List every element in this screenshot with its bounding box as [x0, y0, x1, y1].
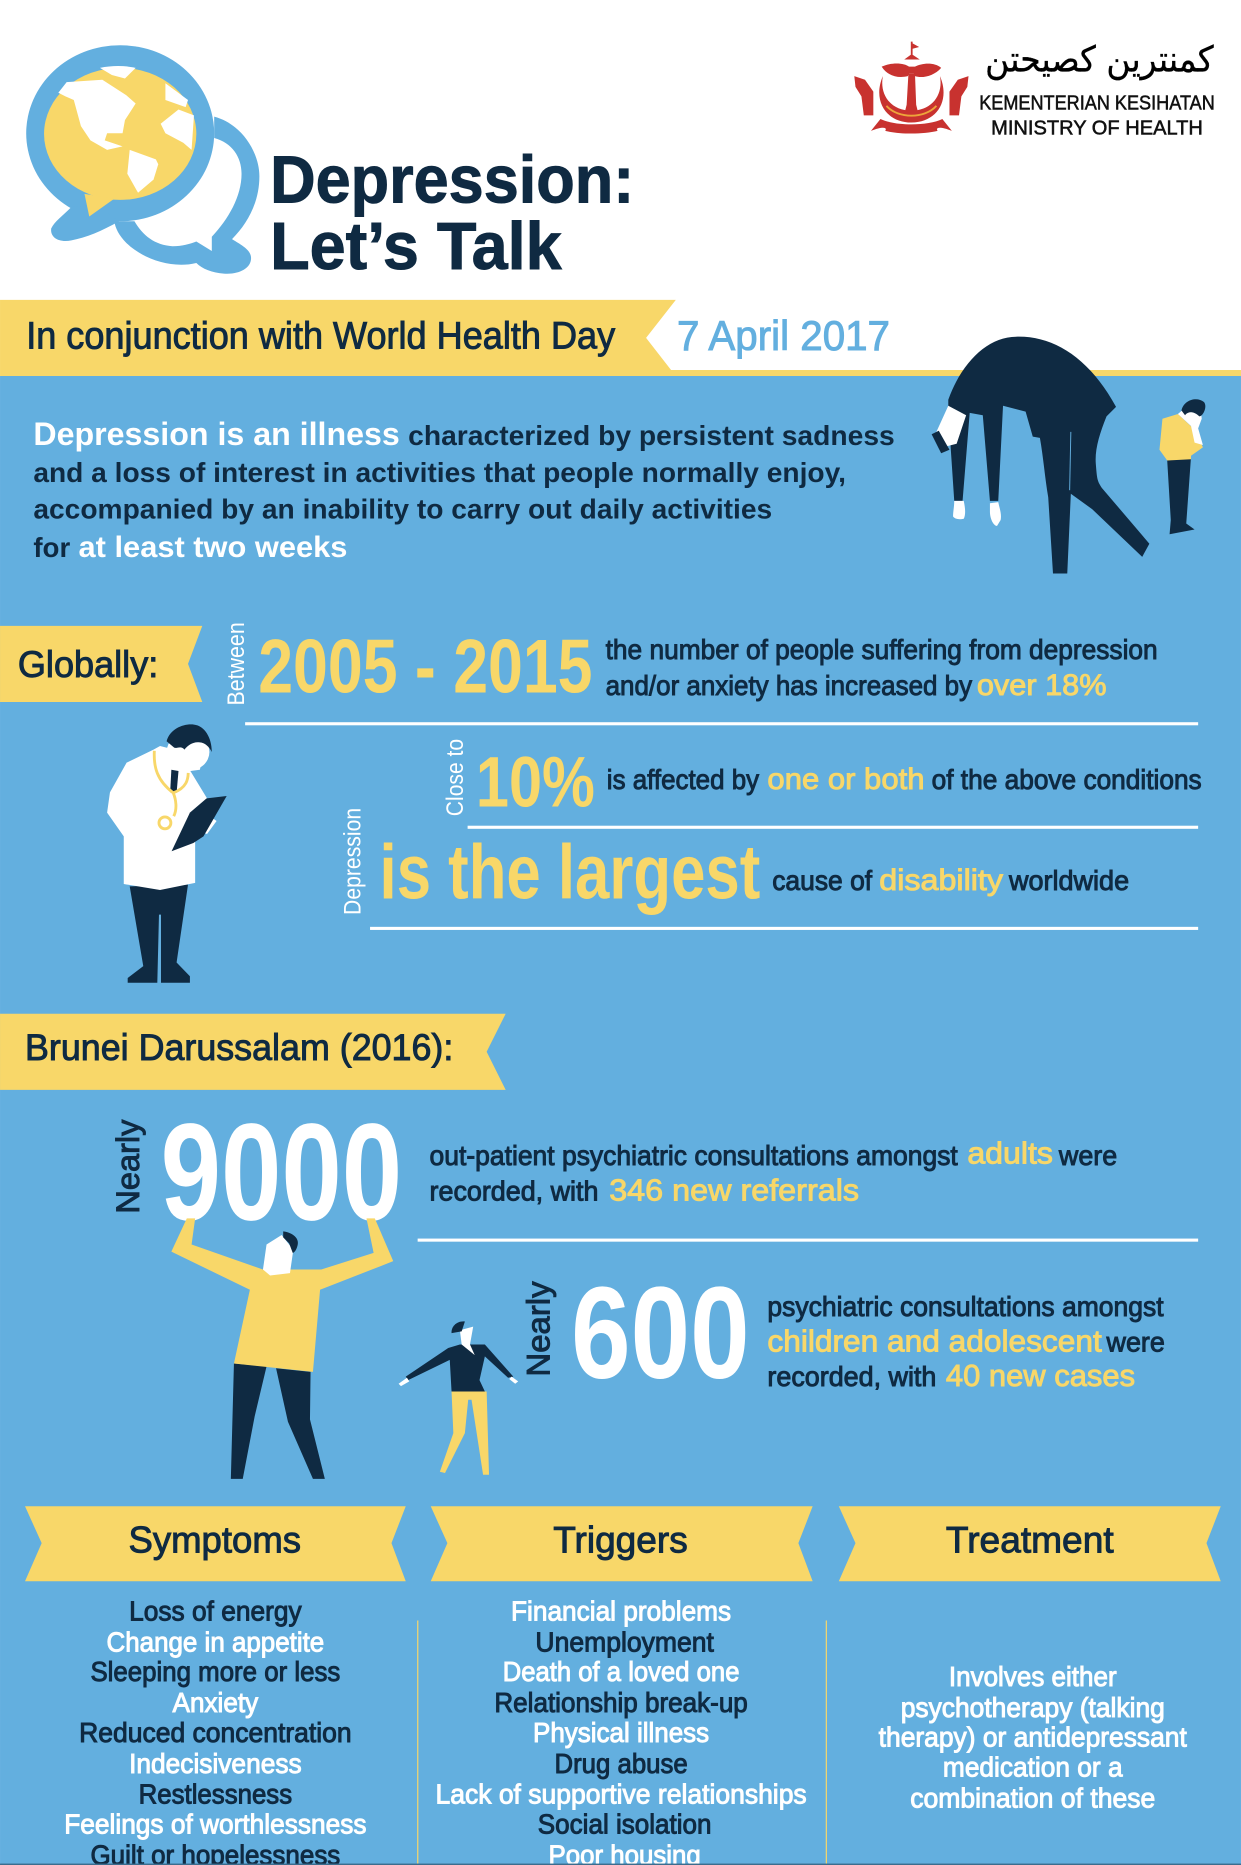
stat: nearly 600: psychiatric consultations amongst — [767, 1291, 1164, 1322]
icon: speech bubbles with globe — [26, 45, 259, 274]
text block: definition of depression: at least two weeks — [79, 531, 347, 564]
text block: treatment: psychotherapy (talking — [901, 1692, 1165, 1723]
stat: is the largest: worldwide — [1008, 865, 1129, 896]
stat: 2005 - 2015: Between — [223, 622, 250, 706]
text block: treatment — [879, 1661, 1187, 1813]
text block: definition of depression: characterized by persistent sadness — [408, 420, 895, 451]
list: triggers: Financial problems — [511, 1595, 731, 1626]
stat: nearly 9000: out-patient psychiatric consultations amongst — [430, 1140, 958, 1171]
stat: 2005 - 2015: 2005 - 2015 — [258, 624, 593, 709]
list: triggers: Physical illness — [533, 1717, 709, 1748]
list: triggers: Lack of supportive relationships — [435, 1779, 807, 1810]
list: symptoms: Change in appetite — [107, 1626, 324, 1657]
stat: 2005 - 2015: and/or anxiety has increased by — [606, 670, 972, 701]
banner: world health day — [0, 300, 1241, 376]
list: triggers: Relationship break-up — [494, 1687, 748, 1718]
heading ribbon: triggers — [431, 1506, 813, 1581]
stat: is the largest: Depression — [340, 808, 367, 915]
list: symptoms: Loss of energy — [129, 1595, 302, 1626]
list: triggers: Death of a loved one — [503, 1656, 739, 1687]
list: symptoms — [64, 1595, 366, 1865]
stat: nearly 600: children and adolescent — [767, 1324, 1102, 1359]
text block: treatment: Involves either — [949, 1661, 1117, 1692]
stat: is the largest: cause of — [772, 865, 872, 896]
stat: nearly 9000 — [110, 1096, 1117, 1250]
stat: 2005 - 2015: the number of people suffering from depression — [606, 634, 1158, 665]
heading ribbon: treatment — [839, 1506, 1221, 1581]
banner: globally — [0, 626, 202, 702]
illustration: man lifting number — [171, 1218, 393, 1479]
text block: treatment: therapy) or antidepressant — [879, 1722, 1187, 1753]
stat: is the largest: is the largest — [380, 829, 760, 915]
heading ribbon: symptoms: Symptoms — [129, 1520, 301, 1561]
stat: 2005 - 2015: over 18% — [977, 669, 1107, 702]
list: symptoms: Sleeping more or less — [90, 1656, 340, 1687]
stat: nearly 600: Nearly — [521, 1281, 557, 1377]
stat: nearly 600: recorded, with — [767, 1361, 936, 1392]
text block: treatment: medication or a — [943, 1751, 1123, 1782]
date: 7 April 2017 — [677, 312, 890, 359]
illustration: doctor with clipboard — [107, 724, 227, 983]
logo: ministry of health — [854, 39, 1215, 139]
list: symptoms: Restlessness — [139, 1779, 292, 1810]
stat: 10%: of the above conditions — [932, 764, 1202, 795]
stat: nearly 600 — [521, 1260, 1165, 1406]
title — [270, 143, 634, 284]
heading ribbon: symptoms — [25, 1506, 406, 1581]
text block: definition of depression: Depression is an illness — [33, 416, 400, 452]
text block: definition of depression: and a loss of interest in activities that people normally enjoy, — [33, 457, 846, 488]
list: triggers: Unemployment — [535, 1626, 714, 1657]
stat: 10% — [442, 739, 1202, 823]
stat: is the largest — [340, 808, 1129, 915]
text block: treatment: combination of these — [910, 1782, 1155, 1813]
title: Let’s Talk — [270, 210, 563, 284]
stat: 10%: is affected by — [607, 764, 759, 795]
stat: 10%: Close to — [442, 739, 469, 816]
stat: 2005 - 2015 — [223, 622, 1158, 709]
list: symptoms: Indecisiveness — [129, 1748, 302, 1779]
stat: nearly 9000: were — [1058, 1140, 1117, 1171]
title: Depression: — [270, 143, 634, 217]
text: jawi ministry name: كمنترين كصيحتن — [985, 39, 1214, 80]
stat: nearly 600: 600 — [571, 1260, 750, 1406]
illustration: woman with outstretched arms — [399, 1321, 518, 1475]
logo: ministry of health: KEMENTERIAN KESIHATAN — [979, 91, 1215, 114]
stat: 10%: 10% — [476, 743, 595, 823]
stat: nearly 600: were — [1106, 1327, 1165, 1358]
banner: brunei darussalam: Brunei Darussalam (2016): — [25, 1027, 453, 1068]
illustration: small sad figure — [1159, 399, 1205, 534]
stat: is the largest: disability — [879, 864, 1003, 897]
stat: nearly 9000: recorded, with — [430, 1176, 598, 1207]
list: triggers: Drug abuse — [554, 1748, 688, 1779]
banner: globally: Globally: — [18, 644, 158, 685]
list: symptoms: Reduced concentration — [79, 1717, 352, 1748]
list: triggers — [435, 1595, 807, 1865]
stat: nearly 9000: 346 new referrals — [609, 1173, 859, 1208]
logo: ministry of health: MINISTRY OF HEALTH — [991, 116, 1203, 139]
banner: brunei darussalam — [0, 1014, 506, 1090]
stat: nearly 600: 40 new cases — [946, 1358, 1135, 1393]
list: triggers: Social isolation — [538, 1808, 712, 1839]
text block: definition of depression: for — [33, 532, 70, 563]
list: symptoms: Feelings of worthlessness — [64, 1808, 366, 1839]
icon: brunei emblem — [854, 42, 969, 134]
heading ribbon: treatment: Treatment — [946, 1520, 1114, 1561]
stat: 10%: one or both — [767, 763, 924, 796]
stat: nearly 9000: adults — [967, 1136, 1053, 1171]
text block: definition of depression: accompanied by an inability to carry out daily activities — [33, 494, 772, 525]
stat: nearly 9000: Nearly — [110, 1120, 146, 1214]
banner: world health day: In conjunction with World Health Day — [26, 316, 615, 358]
illustration: bent-over giant figure — [932, 337, 1149, 573]
list: symptoms: Anxiety — [173, 1687, 258, 1718]
heading ribbon: triggers: Triggers — [553, 1520, 688, 1561]
text block: definition of depression — [33, 416, 895, 564]
stat: nearly 9000: 9000 — [161, 1096, 402, 1250]
